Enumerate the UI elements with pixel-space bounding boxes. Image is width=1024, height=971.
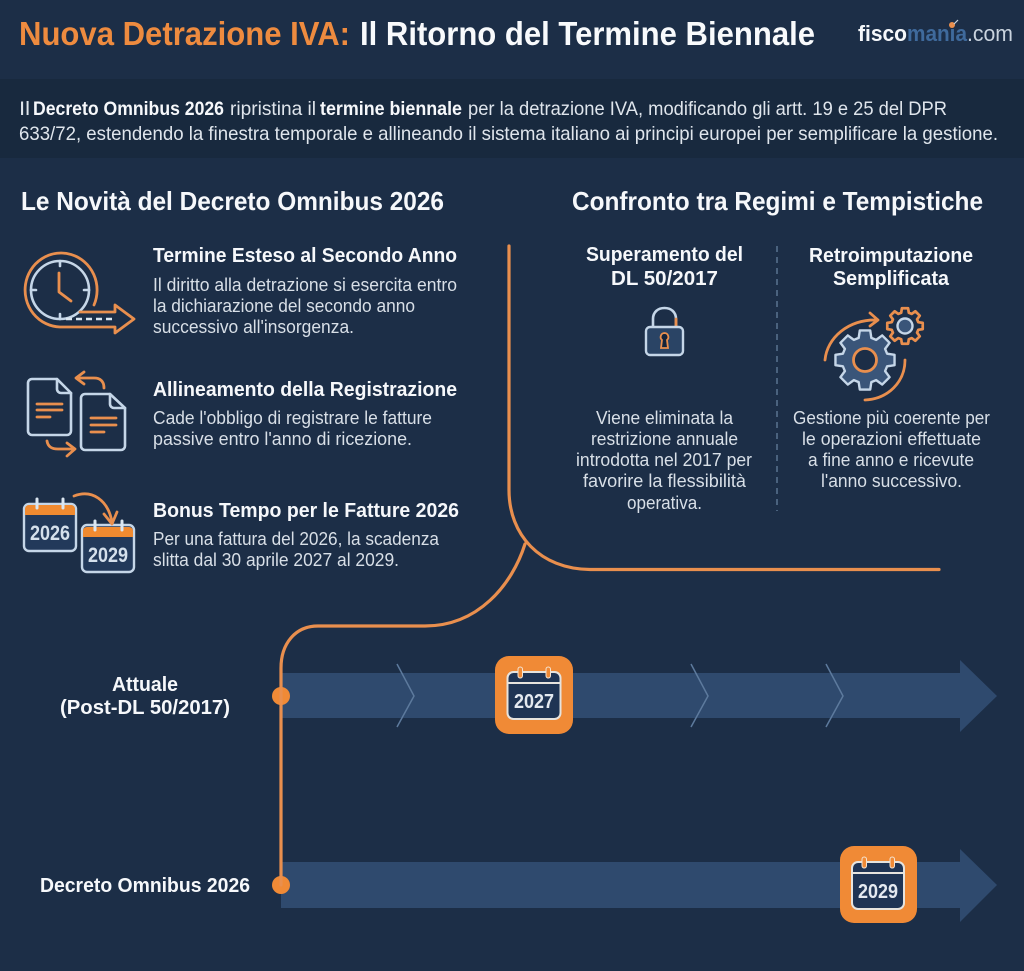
heading: DL 50/2017 <box>611 267 718 290</box>
intro text: ripristina il <box>230 98 316 120</box>
heading <box>586 243 743 290</box>
logo: fiscomania.com: fisco <box>858 21 907 46</box>
icon: padlock <box>646 308 683 355</box>
intro text: 633/72, estendendo la finestra temporale e allineando il sistema italiano ai principi europei per semplificare la gestione. <box>19 123 998 145</box>
heading: Superamento del <box>586 243 743 266</box>
title <box>19 16 815 53</box>
column: retroimputazione <box>793 244 990 491</box>
text: operativa. <box>627 492 702 513</box>
text: Gestione più coerente per <box>793 407 990 428</box>
logo: fiscomania.com: .com <box>967 21 1013 46</box>
intro text: termine biennale <box>320 98 462 120</box>
title: Il Ritorno del Termine Biennale <box>360 16 815 53</box>
text: l'anno successivo. <box>821 470 962 491</box>
icon: documents <box>28 372 125 456</box>
logo: fiscomania.com <box>858 20 1013 46</box>
icon: clock with arrow <box>25 253 134 333</box>
text: favorire la flessibilità <box>583 470 747 491</box>
text: introdotta nel 2017 per <box>576 449 752 470</box>
item: allineamento: passive entro l'anno di ricezione. <box>153 428 412 449</box>
title: Nuova Detrazione IVA: <box>19 16 350 53</box>
calendar 2027 <box>495 656 573 734</box>
icon: calendars 2026 to 2029 <box>24 494 134 572</box>
item: allineamento <box>28 372 457 456</box>
item: bonus tempo: slitta dal 30 aprile 2027 al 2029. <box>153 549 399 570</box>
icon: gears <box>825 308 923 400</box>
item: allineamento: Cade l'obbligo di registrare le fatture <box>153 407 432 428</box>
heading: Semplificata <box>833 267 950 290</box>
label: Decreto Omnibus 2026 <box>40 874 250 897</box>
heading: novità: Le Novità del Decreto Omnibus 2026 <box>21 186 444 216</box>
item: bonus tempo <box>24 494 459 572</box>
item: termine esteso <box>25 244 457 337</box>
heading <box>809 244 973 290</box>
intro text: Il <box>19 98 30 120</box>
label: Attuale <box>112 673 178 696</box>
dot <box>272 876 290 894</box>
arrow bar <box>281 849 997 922</box>
text: Allineamento della Registrazione <box>153 378 457 401</box>
item: termine esteso: la dichiarazione del secondo anno <box>153 295 415 316</box>
chevrons <box>397 664 843 727</box>
dot <box>272 687 290 705</box>
text <box>576 407 752 513</box>
timeline: decreto omnibus <box>40 846 997 923</box>
timeline: attuale <box>60 656 997 734</box>
text: Viene eliminata la <box>596 407 734 428</box>
text: Termine Esteso al Secondo Anno <box>153 244 457 267</box>
calendar 2029: 2029 <box>858 881 898 903</box>
text <box>793 407 990 491</box>
arrow bar <box>281 660 997 732</box>
intro text <box>19 98 998 145</box>
text: Bonus Tempo per le Fatture 2026 <box>153 499 459 522</box>
connector lines <box>281 246 939 885</box>
item: termine esteso: successivo all'insorgenza. <box>153 316 354 337</box>
column: superamento <box>576 243 752 513</box>
text: le operazioni effettuate <box>802 428 981 449</box>
logo: fiscomania.com: mania <box>907 21 968 46</box>
heading: confronto: Confronto tra Regimi e Tempistiche <box>572 186 983 216</box>
text: restrizione annuale <box>591 428 738 449</box>
item: bonus tempo: Per una fattura del 2026, la scadenza <box>153 528 440 549</box>
intro text: Decreto Omnibus 2026 <box>33 98 224 120</box>
text: a fine anno e ricevute <box>808 449 974 470</box>
intro text: per la detrazione IVA, modificando gli artt. 19 e 25 del DPR <box>468 98 947 120</box>
calendar 2029 <box>840 846 917 923</box>
icon: calendars 2026 to 2029: 2029 <box>88 544 128 567</box>
calendar 2027: 2027 <box>514 691 554 713</box>
heading: Retroimputazione <box>809 244 973 267</box>
label: (Post-DL 50/2017) <box>60 696 230 719</box>
icon: calendars 2026 to 2029: 2026 <box>30 522 70 545</box>
item: termine esteso: Il diritto alla detrazione si esercita entro <box>153 274 457 295</box>
label <box>60 673 230 719</box>
intro band <box>0 79 1024 158</box>
